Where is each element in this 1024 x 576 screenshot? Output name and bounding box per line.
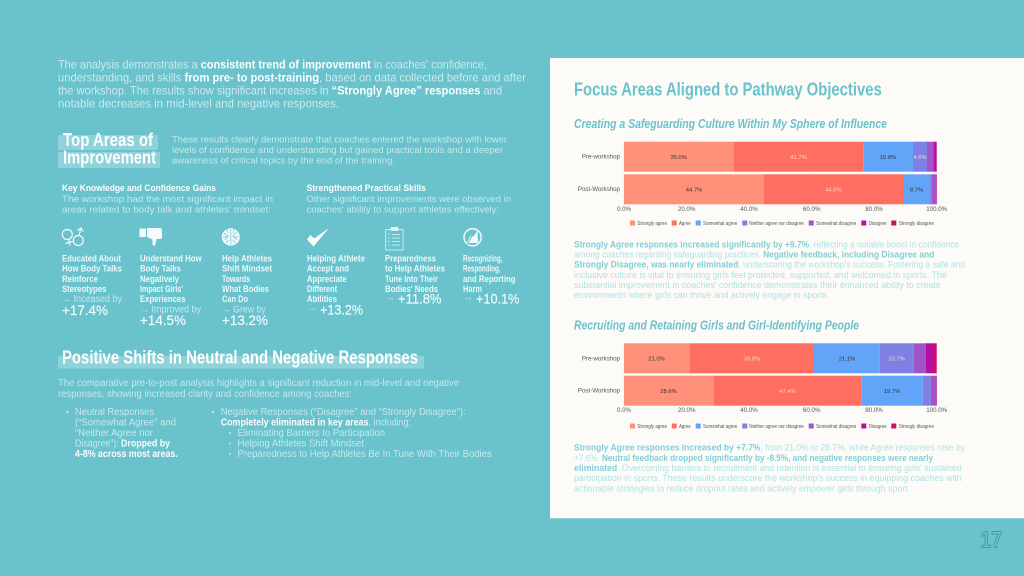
icon: thumbs down [140, 228, 162, 246]
stat: reporting harm: Responding, [463, 264, 501, 275]
stacked bar chart: recruiting: 60.0% [803, 407, 821, 414]
stat: negative impact: Impact Girls' [140, 284, 183, 295]
legend [630, 424, 934, 430]
stat: different abilities: Appreciate [307, 274, 347, 285]
bullet: neutral responses: (“Somewhat Agree” and [75, 418, 176, 428]
stat: reporting harm [463, 229, 520, 306]
stat: negative impact [140, 228, 202, 328]
stacked bar chart: safeguarding: 40.0% [740, 206, 758, 213]
legend: Somewhat agree [703, 221, 737, 227]
bullet: negative responses: Completely eliminated in key areas, including: [221, 418, 411, 428]
text block: safeguarding findings: substantial improvement in coaches' confidence demonstrates their enhanced ability to create [574, 280, 941, 291]
intro paragraph: The analysis demonstrates a consistent trend of improvement in coaches' confidence, [58, 58, 487, 72]
stat: negative impact: Body Talks [140, 264, 181, 275]
stacked bar chart: safeguarding: Pre-workshop [582, 154, 621, 161]
legend: Disagree [869, 424, 887, 430]
icon: clipboard [386, 228, 403, 250]
stat: reporting harm: and Reporting [463, 274, 516, 285]
stat: different abilities: Abilities [307, 294, 337, 305]
legend: Neither agree nor disagree [749, 424, 804, 430]
legend: Disagree [869, 221, 887, 227]
legend: Agree [679, 221, 691, 227]
stacked bar chart: safeguarding: 80.0% [865, 206, 883, 213]
bar: post-workshop [624, 376, 937, 406]
bar: post-workshop: 44.7% [686, 188, 702, 194]
text block: practical skills: coaches' ability to support athletes effectively: [306, 204, 499, 216]
bar: post-workshop: 47.4% [779, 389, 796, 395]
stat: reporting harm: +10.1% [476, 290, 520, 306]
stat: shift mindset: What Bodies [222, 284, 269, 295]
stat: different abilities: Accept and [307, 264, 349, 275]
text block: recruiting findings: eliminated. Overcoming barriers to recruitment and retention is essential to ensuring girls' sustained [574, 463, 962, 474]
legend [630, 220, 934, 227]
stat: different abilities [307, 228, 365, 318]
stat: shift mindset [222, 228, 273, 328]
stat: preparedness: to Help Athletes [385, 264, 445, 275]
subheading: safeguarding: Creating a Safeguarding Culture Within My Sphere of Influence [574, 116, 887, 131]
stat: preparedness [385, 228, 445, 306]
stat: negative impact: Negatively [140, 274, 180, 285]
legend: Strongly disagree [899, 221, 934, 227]
heading: Top Areas of Improvement: Top Areas of [63, 130, 154, 150]
text block: recruiting findings: actionable strategies to reduce dropout rates and actively empower girls through sport. [574, 484, 910, 494]
text block: recruiting findings [574, 443, 965, 494]
heading: Top Areas of Improvement [58, 130, 160, 168]
legend: Neither agree nor disagree [749, 221, 804, 227]
text block: key knowledge: Key Knowledge and Confidence Gains [62, 183, 216, 194]
legend: Somewhat disagree [816, 424, 856, 430]
bullet: negative responses: Preparedness to Help Athletes Be In Tune With Their Bodies [238, 449, 492, 460]
legend: Somewhat disagree [816, 221, 856, 227]
text block: safeguarding findings: inclusive culture is vital to ensuring girls feel protected, supported, and welcomed in sports. The [574, 270, 947, 281]
text block: safeguarding findings: Strongly Disagree, was nearly eliminated, underscoring the workshop's success. Fostering a safe and [574, 260, 965, 271]
icon: gender symbols [62, 228, 84, 246]
bar: pre-workshop: 35.0% [670, 155, 687, 161]
stat: shift mindset: Help Athletes [222, 254, 272, 264]
stat: negative impact: Experiences [140, 294, 186, 305]
stat: preparedness: +11.8% [398, 290, 442, 306]
icon: check mark [307, 228, 329, 246]
stat: shift mindset: → Grew by [222, 304, 266, 315]
stacked bar chart: safeguarding: 100.0% [926, 206, 948, 213]
comparative analysis paragraph: The comparative pre-to-post analysis highlights a significant reduction in mid-level and negative [58, 378, 460, 389]
stat: preparedness: Preparedness [385, 254, 436, 264]
text block: practical skills: Other significant improvements were observed in [306, 194, 511, 205]
stat: body talk stereotypes: Reinforce [62, 274, 98, 285]
stat: preparedness: Tune Into Their [385, 274, 438, 285]
intro paragraph [58, 58, 526, 110]
stat: reporting harm: Recognizing, [463, 254, 503, 264]
stat: body talk stereotypes: How Body Talks [62, 264, 122, 275]
stacked bar chart: safeguarding: 0.0% [617, 206, 632, 213]
bar: post-workshop: 44.6% [825, 188, 842, 194]
text block: practical skills: Strengthened Practical Skills [306, 183, 426, 194]
stat: body talk stereotypes: → Inceased by [62, 294, 122, 305]
text block: practical skills [306, 183, 511, 216]
stat: reporting harm: → [463, 292, 473, 304]
bar: post-workshop [624, 174, 937, 204]
top areas description [172, 134, 508, 166]
stat: shift mindset: Can Do [222, 294, 248, 305]
stat: body talk stereotypes: Educated About [62, 254, 122, 264]
heading: Positive Shifts: Positive Shifts in Neutral and Negative Responses [62, 348, 418, 368]
bar: post-workshop: 28.6% [660, 389, 677, 395]
text block: recruiting findings: participation in sports. These results underscore the workshop's success in equipping coaches with [574, 473, 962, 484]
stacked bar chart: recruiting: 20.0% [678, 407, 696, 414]
bar: post-workshop: 8.7% [910, 188, 923, 194]
stat: negative impact: Understand How [140, 254, 202, 264]
bar: pre-workshop: 21.1% [839, 356, 855, 362]
comparative analysis paragraph: responses, showing increased clarity and confidence among coaches: [58, 389, 352, 400]
stacked bar chart: recruiting [578, 343, 948, 430]
top areas description: awareness of critical topics by the end of the training. [172, 156, 395, 166]
stat: body talk stereotypes [62, 228, 122, 318]
stat: shift mindset: Towards [222, 274, 250, 285]
bar: post-workshop: 19.7% [884, 389, 900, 395]
bar: pre-workshop: 41.7% [790, 155, 807, 161]
stacked bar chart: recruiting: Post-Workshop [578, 387, 621, 394]
bullet: negative responses: Helping Athletes Shift Mindset [238, 438, 364, 450]
stat: shift mindset: +13.2% [222, 312, 268, 328]
stat: reporting harm: Harm [463, 284, 482, 295]
intro paragraph: notable decreases in mid-level and negative responses. [58, 96, 339, 110]
heading: Top Areas of Improvement: Improvement [63, 148, 156, 168]
stat: different abilities: → [307, 303, 317, 314]
intro paragraph: understanding, and skills from pre- to post-training, based on data collected before and after [58, 70, 526, 84]
bar: pre-workshop: 21.0% [648, 356, 665, 362]
text block: key knowledge: areas related to body talk and athletes' mindset: [62, 204, 271, 216]
intro paragraph: the workshop. The results show significant increases in “Strongly Agree” responses and [58, 84, 502, 98]
stacked bar chart: recruiting: 100.0% [926, 407, 948, 414]
stat: body talk stereotypes: +17.4% [62, 302, 108, 318]
bar: pre-workshop: 4.6% [913, 155, 927, 161]
icon: brain [222, 228, 240, 246]
legend: Strongly agree [637, 424, 667, 430]
bullet: neutral responses: Disagree”): Dropped by [75, 438, 170, 450]
stat: preparedness: Bodies' Needs [385, 284, 438, 295]
stat: different abilities: Different [307, 284, 338, 295]
subheading: recruiting: Recruiting and Retaining Girls and Girl-Identifying People [574, 318, 859, 332]
bar: pre-workshop: 39.8% [744, 356, 760, 362]
panel title: Focus Areas Aligned to Pathway Objectives [574, 80, 882, 100]
stacked bar chart: safeguarding: Post-Workshop [578, 186, 621, 193]
text block: safeguarding findings [574, 239, 965, 301]
bullet: negative responses [212, 407, 492, 460]
stat: different abilities: Helping Athlete [307, 254, 365, 264]
stat: different abilities: +13.2% [320, 302, 363, 318]
stacked bar chart: safeguarding: 60.0% [803, 206, 821, 213]
text block: safeguarding findings: among coaches regarding safeguarding practices. Negative feedback, including Disagree and [574, 250, 934, 260]
stat: shift mindset: Shift Mindset [222, 264, 273, 275]
bar: pre-workshop: 15.8% [880, 155, 896, 161]
legend: Somewhat agree [703, 424, 737, 430]
bar: pre-workshop [624, 142, 937, 172]
panel: focus areas [550, 58, 1024, 518]
bullet: neutral responses: “Neither Agree nor [75, 428, 154, 439]
top areas description: levels of confidence and understanding but gained practical tools and a deeper [172, 145, 504, 156]
text block: key knowledge: The workshop had the most significant impact in [62, 194, 273, 205]
bullet: neutral responses: 4-8% across most areas. [75, 449, 178, 460]
stat: body talk stereotypes: Stereotypes [62, 284, 106, 295]
stacked bar chart: recruiting: 80.0% [865, 407, 883, 414]
top areas description: These results clearly demonstrate that coaches entered the workshop with lower [172, 134, 508, 146]
stacked bar chart: safeguarding [578, 142, 948, 227]
stacked bar chart: safeguarding: 20.0% [678, 206, 696, 213]
stat: negative impact: +14.5% [140, 312, 186, 328]
legend: Strongly disagree [899, 424, 934, 430]
comparative analysis paragraph [58, 378, 460, 400]
stacked bar chart: recruiting: Pre-workshop [582, 355, 621, 362]
stacked bar chart: recruiting: 40.0% [740, 407, 758, 414]
bullet: neutral responses: Neutral Responses [75, 407, 154, 418]
bar: pre-workshop [624, 343, 937, 373]
page number: 17 [980, 526, 1002, 552]
bar: pre-workshop: 10.7% [888, 356, 905, 362]
legend: Strongly agree [637, 221, 667, 227]
bullet: neutral responses [66, 407, 178, 460]
text block: safeguarding findings: Strongly Agree responses increased significantly by +9.7%, reflecting a notable boost in confidence [574, 239, 959, 250]
text block: safeguarding findings: environments where girls can thrive and actively engage in sports. [574, 290, 829, 301]
bullet: negative responses: Negative Responses (“Disagree” and “Strongly Disagree”): [221, 407, 466, 418]
bullet: negative responses: Eliminating Barriers to Participation [238, 428, 385, 439]
legend: Agree [679, 424, 691, 430]
text block: recruiting findings: Strongly Agree responses increased by +7.7%, from 21.0% to 28.7%, while Agree responses rose by [574, 443, 965, 454]
stat: negative impact: → Improved by [140, 304, 201, 315]
text block: key knowledge [62, 183, 273, 216]
stat: preparedness: → [385, 292, 395, 304]
icon: no harm circle [464, 229, 481, 246]
text block: recruiting findings: +7.6%. Neutral feedback dropped significantly by -8.5%, and negative responses were nearly [574, 453, 934, 464]
stacked bar chart: recruiting: 0.0% [617, 407, 632, 414]
